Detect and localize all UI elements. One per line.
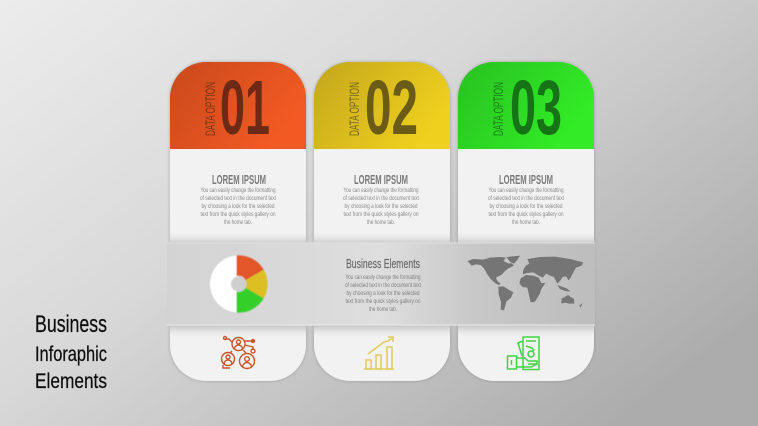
- body text: of selected text in the document text: [345, 282, 421, 289]
- heading: LOREM IPSUM: [499, 172, 553, 187]
- body text: of selected text in the document text: [343, 195, 419, 202]
- body text: You can easily change the formatting: [200, 187, 276, 194]
- number 01: 01: [220, 65, 270, 151]
- body text: text from the quick styles gallery on: [200, 211, 276, 218]
- body text: text from the quick styles gallery on: [346, 298, 421, 305]
- body text: [488, 187, 564, 226]
- title: business infographic elements: Inforaphic: [35, 343, 107, 366]
- panel: option 03: [458, 62, 594, 381]
- number 02: 02: [365, 65, 418, 151]
- body text: by choosing a look for the selected: [202, 203, 275, 210]
- body text: by choosing a look for the selected: [344, 203, 418, 210]
- body text: [343, 187, 419, 226]
- panel: option 01: [170, 62, 306, 381]
- icon: money in hand: [508, 337, 539, 370]
- body text: of selected text in the document text: [200, 195, 276, 202]
- body text: [345, 274, 421, 313]
- body text: by choosing a look for the selected: [346, 290, 420, 297]
- heading: business elements: Business Elements: [346, 256, 420, 271]
- title: business infographic elements: Business: [35, 311, 107, 338]
- body text: text from the quick styles gallery on: [344, 211, 419, 218]
- heading: LOREM IPSUM: [354, 172, 408, 187]
- world map: [467, 256, 583, 310]
- body text: You can easily change the formatting: [344, 187, 419, 194]
- number 03: 03: [510, 65, 562, 151]
- body text: the home tab.: [367, 219, 395, 226]
- heading: LOREM IPSUM: [212, 172, 266, 187]
- body text: text from the quick styles gallery on: [488, 211, 564, 218]
- body text: the home tab.: [369, 306, 397, 313]
- label: data option 03: DATA OPTION: [490, 82, 506, 136]
- panel: business elements band: [167, 243, 595, 326]
- body text: the home tab.: [224, 219, 252, 226]
- body text: by choosing a look for the selected: [490, 203, 563, 210]
- body text: [200, 187, 276, 226]
- body text: You can easily change the formatting: [488, 187, 564, 194]
- title: business infographic elements: Elements: [35, 370, 107, 393]
- label: data option 01: DATA OPTION: [202, 82, 218, 136]
- panel: option 02: [314, 62, 450, 381]
- title: business infographic elements: [35, 311, 107, 393]
- icon: people network: [222, 336, 255, 368]
- body text: You can easily change the formatting: [346, 274, 421, 281]
- label: data option 02: DATA OPTION: [346, 82, 362, 136]
- donut chart: [210, 255, 268, 313]
- body text: of selected text in the document text: [488, 195, 564, 202]
- body text: the home tab.: [512, 219, 540, 226]
- soft shadows around band: [170, 231, 594, 339]
- icon: growth chart: [364, 337, 394, 369]
